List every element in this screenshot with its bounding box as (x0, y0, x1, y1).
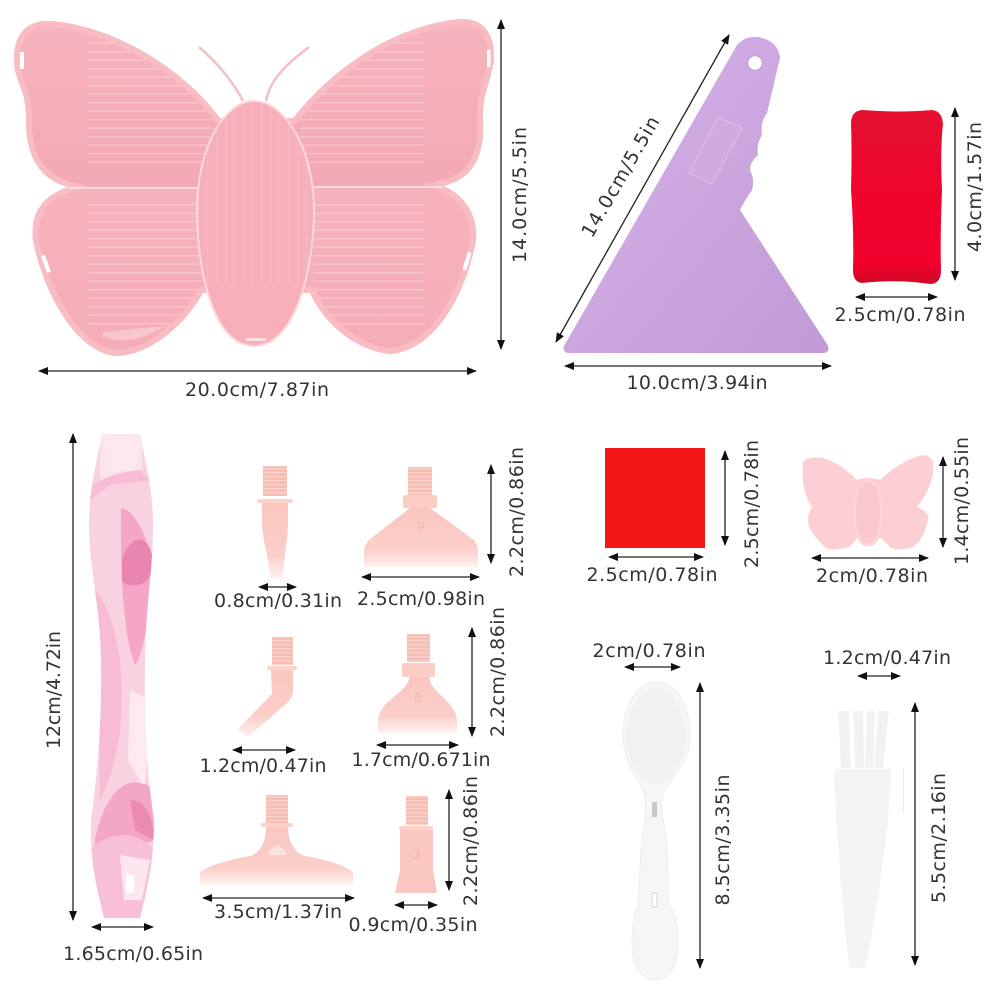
panel: butterfly tray (14, 19, 531, 401)
arrow: square height (724, 451, 726, 545)
arrow: tip width (259, 586, 296, 588)
arrow: cloth width (856, 296, 937, 298)
icon: small square tip: 3 (413, 848, 421, 863)
arrow: brush length (914, 703, 916, 965)
arrow: spoon length (699, 683, 701, 968)
icon: medium flared tip: 6 (414, 691, 422, 706)
icon: white brush (834, 711, 904, 968)
icon: wide tip with number 9 (364, 467, 478, 567)
label: tray width: 20.0cm/7.87in (185, 379, 329, 401)
panel: red cloth sleeve (834, 108, 986, 326)
icon: marbled pink pen (89, 434, 154, 918)
arrow: tip width (395, 904, 437, 906)
panel: spoon (592, 640, 734, 980)
label: butterfly width: 2cm/0.78in (816, 565, 928, 587)
label: pen width: 1.65cm/0.65in (63, 943, 203, 965)
label: scraper diagonal: 14.0cm/5.5in (577, 113, 664, 241)
arrow: brush width (858, 675, 900, 677)
label: tray height: 14.0cm/5.5in (509, 127, 531, 263)
arrow: tip width (362, 576, 479, 578)
panel: pen tip 3.5cm (200, 795, 354, 923)
label: tip height: 2.2cm/0.86in (506, 447, 528, 577)
arrow: tip width (377, 744, 458, 746)
arrow: spoon width (625, 666, 680, 668)
icon: butterfly tray wings (14, 19, 494, 356)
panel: pen (43, 430, 203, 965)
label: pen length: 12cm/4.72in (43, 631, 65, 749)
arrow: butterfly height (942, 457, 944, 547)
icon: medium flared tip (378, 634, 457, 733)
arrow: pen length (72, 434, 74, 920)
label: square width: 2.5cm/0.78in (586, 564, 718, 586)
label: tip width: 1.7cm/0.671in (352, 749, 490, 771)
label: cloth width: 2.5cm/0.78in (834, 304, 966, 326)
icon: bent tip (238, 637, 297, 737)
label: cloth height: 4.0cm/1.57in (964, 122, 986, 252)
label: tip height: 2.2cm/0.86in (460, 776, 482, 906)
icon: butterfly tray body (197, 101, 314, 346)
arrow: tip height (448, 790, 450, 890)
label: tip width: 2.5cm/0.98in (357, 588, 485, 610)
panel: small butterfly wax pad (803, 437, 973, 587)
arrow: tip width (203, 897, 354, 899)
arrow: tip width (233, 749, 295, 751)
label: brush length: 5.5cm/2.16in (928, 773, 950, 903)
label: tip width: 0.9cm/0.35in (348, 914, 478, 936)
arrow: scraper diagonal (556, 35, 729, 342)
panel: pen tip 1.2cm (200, 637, 326, 777)
icon: white double spoon (623, 682, 690, 980)
icon: extra wide tip (200, 795, 353, 885)
label: tip height: 2.2cm/0.86in (487, 607, 509, 737)
label: butterfly height: 1.4cm/0.55in (951, 437, 973, 565)
arrow: tray height (500, 20, 502, 349)
arrow: cloth height (954, 108, 956, 280)
arrow: tip height (471, 628, 473, 736)
label: brush width: 1.2cm/0.47in (823, 647, 951, 669)
icon: butterfly tray antennae (199, 47, 309, 101)
label: square height: 2.5cm/0.78in (741, 440, 763, 568)
icon: red square (605, 448, 705, 548)
panel: red square pad (586, 440, 763, 586)
label: tip width: 3.5cm/1.37in (214, 901, 342, 923)
panel: pen tip 2.5cm (357, 447, 528, 610)
icon: small pink butterfly (803, 455, 933, 549)
arrow: scraper width (565, 365, 831, 367)
panel: pen tip 1.7cm (352, 607, 509, 771)
label: spoon width: 2cm/0.78in (592, 640, 706, 662)
arrow: tray width (39, 370, 476, 372)
arrow: pen width (92, 926, 153, 928)
icon: small square tip (395, 796, 437, 893)
arrow: square width (609, 556, 703, 558)
panel: pen tip 0.8cm (214, 466, 342, 612)
panel: pen tip 0.9cm (348, 776, 482, 936)
panel: purple scraper (556, 35, 831, 394)
label: tip width: 1.2cm/0.47in (200, 755, 326, 777)
icon: wide tip with number 9: 9 (417, 520, 425, 535)
icon: red cloth (851, 110, 943, 284)
panel: cleaning brush (823, 647, 951, 968)
label: scraper width: 10.0cm/3.94in (626, 372, 768, 394)
icon: narrow tip (257, 466, 293, 578)
label: tip width: 0.8cm/0.31in (214, 590, 342, 612)
icon: purple scraper (564, 37, 828, 353)
label: spoon length: 8.5cm/3.35in (712, 774, 734, 906)
arrow: butterfly width (812, 557, 928, 559)
arrow: tip height (490, 465, 492, 563)
